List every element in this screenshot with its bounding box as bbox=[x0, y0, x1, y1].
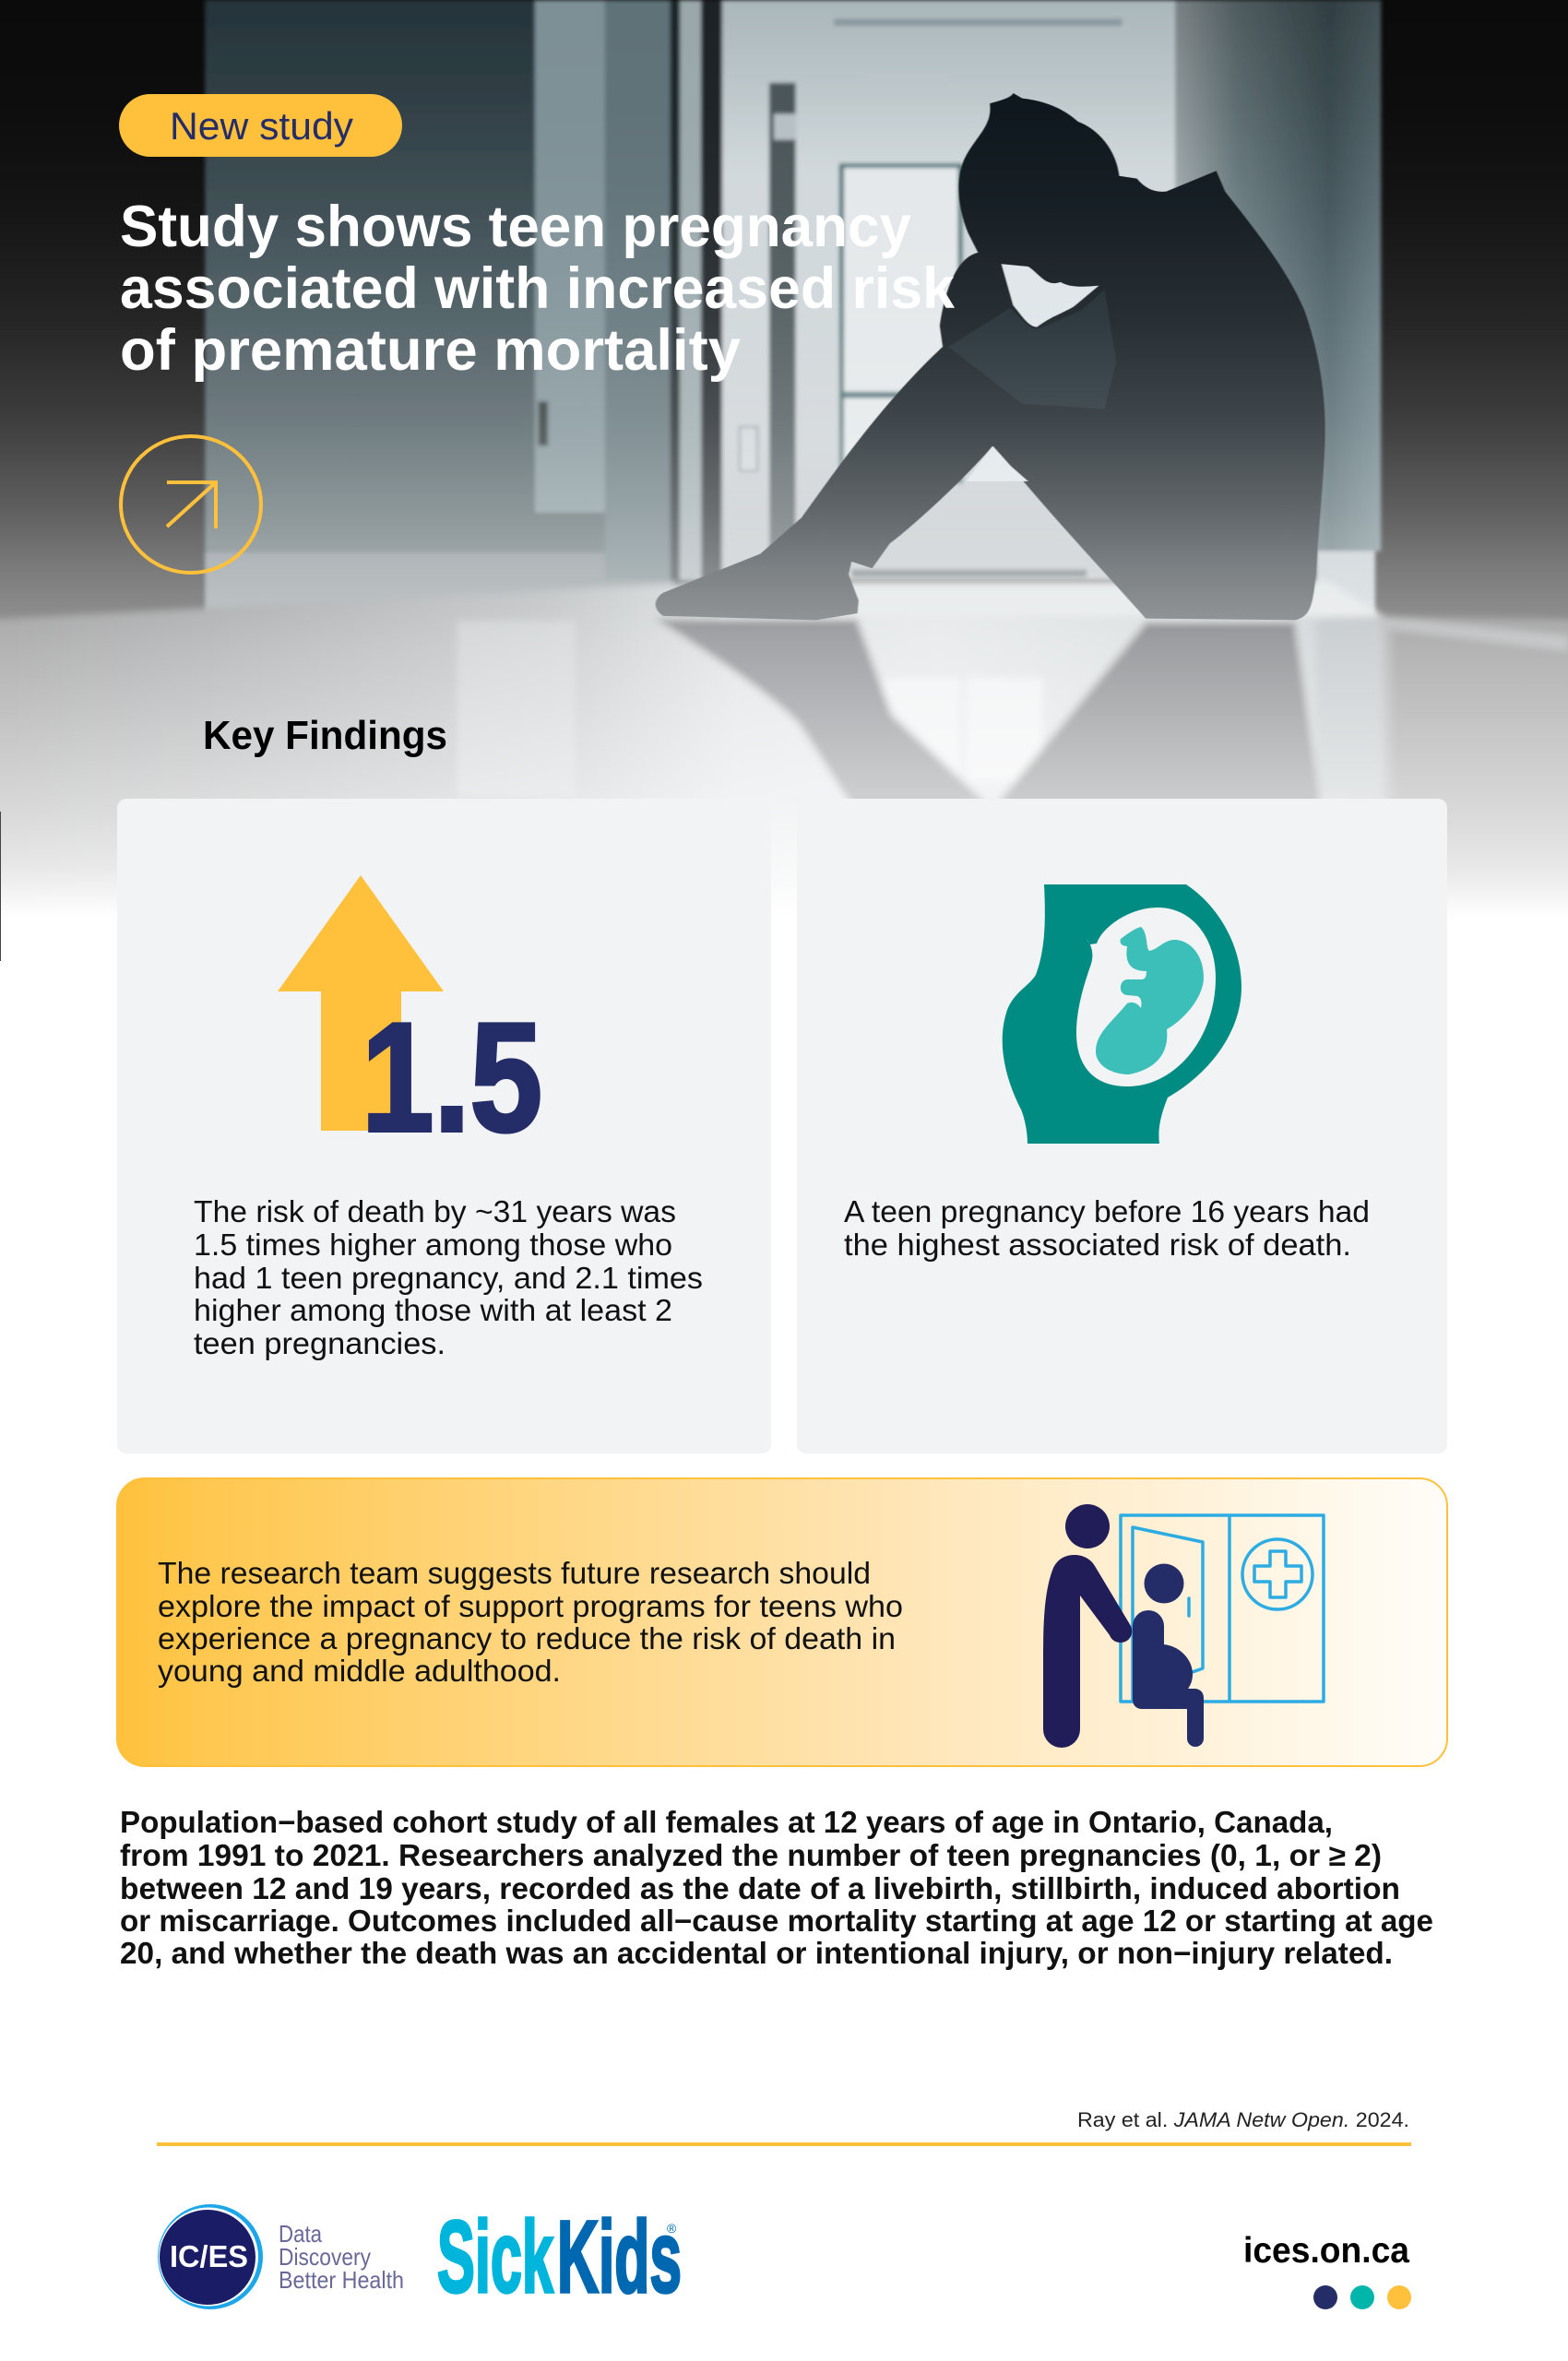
text block: finding one: The risk of death by ~31 years was bbox=[194, 1194, 676, 1228]
logo: IC/ES: Data bbox=[279, 2220, 322, 2248]
text block: callout: explore the impact of support programs for teens who bbox=[158, 1589, 903, 1623]
text block: finding one: teen pregnancies. bbox=[194, 1326, 445, 1360]
title: associated with increased risk bbox=[120, 256, 956, 321]
text block: finding one: 1.5 times higher among those who bbox=[194, 1228, 672, 1262]
text block: finding one: higher among those with at least 2 bbox=[194, 1293, 672, 1327]
text block: callout: young and middle adulthood. bbox=[158, 1654, 561, 1688]
icon: up arrow with 1.5 bbox=[278, 875, 542, 1164]
text block: callout: The research team suggests future research should bbox=[158, 1556, 871, 1590]
logo: IC/ES bbox=[158, 2204, 404, 2309]
panel: finding highest risk before 16 bbox=[797, 799, 1447, 1453]
website link: ices.on.ca bbox=[1243, 2231, 1409, 2271]
text block: finding two bbox=[844, 1194, 1370, 1262]
logo: SickKids: Sick bbox=[437, 2201, 553, 2314]
text block: callout bbox=[158, 1556, 903, 1688]
text block: finding two: the highest associated risk of death. bbox=[844, 1228, 1351, 1262]
title: of premature mortality bbox=[120, 318, 741, 383]
text block: finding two: A teen pregnancy before 16 years had bbox=[844, 1194, 1370, 1228]
text block: study methods: between 12 and 19 years, recorded as the date of a livebirth, stillbirth, induced abortion bbox=[120, 1871, 1400, 1905]
silhouette of teen bbox=[656, 93, 1325, 620]
text block: callout: experience a pregnancy to reduce the risk of death in bbox=[158, 1621, 896, 1655]
white fade overlay bbox=[0, 190, 1568, 922]
text block: study methods: or miscarriage. Outcomes included all−cause mortality starting at age 12 or starting at age bbox=[120, 1904, 1433, 1938]
title bbox=[120, 195, 956, 383]
icon: circled arrow bbox=[121, 436, 261, 573]
logo: IC/ES: Discovery bbox=[279, 2243, 371, 2271]
icon: person helping pregnant teen at clinic bbox=[1043, 1504, 1324, 1748]
citation: Ray et al. JAMA Netw Open. 2024. bbox=[1077, 2108, 1409, 2131]
logo: IC/ES: IC/ES bbox=[170, 2239, 248, 2273]
text block: study methods: from 1991 to 2021. Researchers analyzed the number of teen pregnancies (0, 1, or ≥ 2) bbox=[120, 1838, 1382, 1872]
text block: study methods: Population−based cohort study of all females at 12 years of age in Ontario, Canada, bbox=[120, 1805, 1333, 1839]
heading: Key Findings: Key Findings bbox=[203, 713, 447, 758]
badge: New study: New study bbox=[170, 104, 353, 148]
logo: SickKids: Kids bbox=[557, 2201, 682, 2314]
title: Study shows teen pregnancy bbox=[120, 195, 911, 259]
logo: SickKids: ® bbox=[667, 2221, 677, 2236]
decorative colour dots bbox=[1313, 2285, 1411, 2309]
panel: finding 1.5 times higher risk bbox=[117, 799, 771, 1453]
badge: New study bbox=[119, 94, 402, 157]
hero photo: teen sitting in hallway bbox=[0, 0, 1568, 950]
text block: study methods bbox=[120, 1805, 1433, 1970]
icon: pregnant belly with fetus bbox=[1003, 884, 1241, 1144]
text block: finding one bbox=[194, 1194, 703, 1360]
icon: up arrow with 1.5: 1.5 bbox=[362, 991, 542, 1164]
logo: IC/ES: Better Health bbox=[279, 2266, 404, 2294]
text block: finding one: had 1 teen pregnancy, and 2.1 times bbox=[194, 1261, 703, 1295]
floor with reflections bbox=[0, 577, 1568, 902]
callout: future research bbox=[117, 1478, 1447, 1766]
text block: study methods: 20, and whether the death was an accidental or intentional injury, or non−injury related. bbox=[120, 1936, 1393, 1970]
